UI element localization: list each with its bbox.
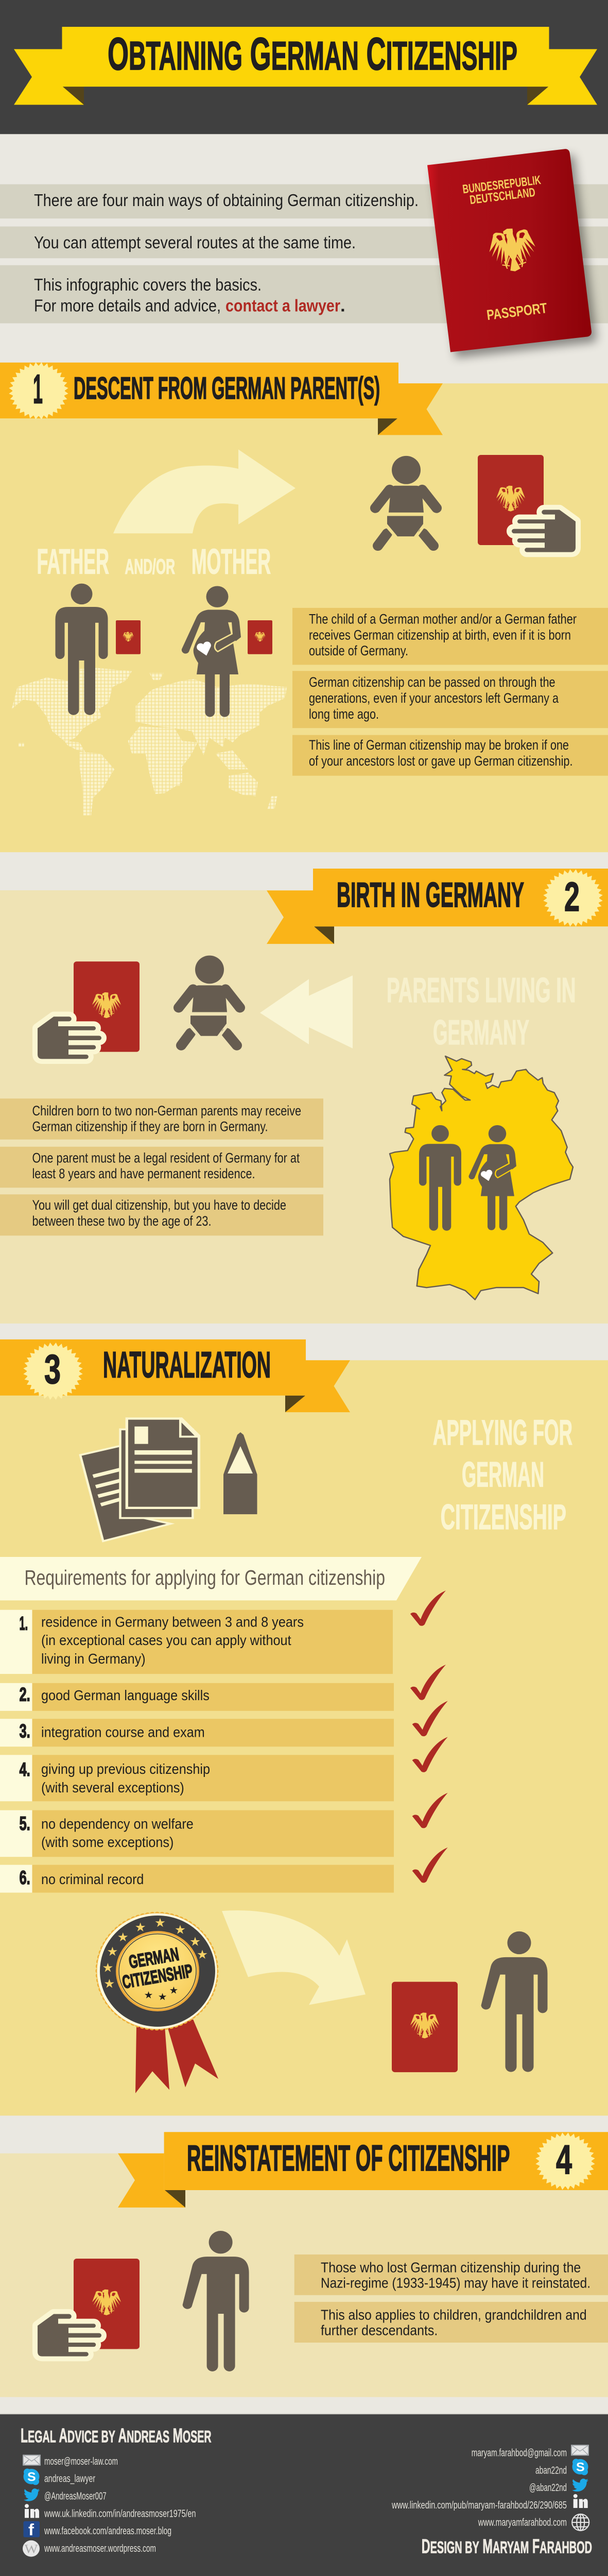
labels: father and/or mother: FATHER bbox=[37, 542, 109, 581]
text: descent facts bbox=[292, 608, 608, 776]
intro panel bbox=[0, 184, 608, 324]
seal: German citizenship: CITIZENSHIP bbox=[120, 1960, 194, 1992]
panel: naturalization bbox=[0, 1360, 608, 2115]
text: reinstatement facts bbox=[294, 2255, 608, 2343]
icon: father bbox=[56, 584, 108, 715]
requirement 2: 2. bbox=[20, 1684, 30, 1705]
contacts: Andreas Moser: W bbox=[25, 2543, 38, 2556]
intro panel: This infographic covers the basics. bbox=[34, 275, 262, 295]
header band bbox=[0, 0, 608, 134]
text: birth facts: least 8 years and have permanent residence. bbox=[32, 1166, 255, 1181]
badge number 2 bbox=[543, 869, 603, 926]
icon: baby bbox=[375, 456, 437, 546]
world map bbox=[12, 668, 287, 815]
icon: person bbox=[183, 2231, 249, 2371]
intro panel: . bbox=[340, 296, 345, 315]
text: birth facts: German citizenship if they are born in Germany. bbox=[32, 1118, 268, 1134]
icon: mother in Germany bbox=[468, 1125, 516, 1230]
intro panel: You can attempt several routes at the same time. bbox=[34, 233, 356, 252]
text: birth facts bbox=[0, 1098, 323, 1235]
requirement 5 bbox=[0, 1810, 394, 1857]
intro panel: contact a lawyer bbox=[225, 296, 340, 315]
icon: mother bbox=[182, 586, 241, 717]
icon: documents bbox=[80, 1418, 199, 1541]
requirement 3 bbox=[0, 1719, 394, 1747]
contacts: Maryam Farahbod bbox=[391, 2445, 589, 2531]
contacts: Andreas Moser bbox=[23, 2455, 196, 2557]
badge number 3 bbox=[23, 1343, 83, 1400]
contacts: Maryam Farahbod: www.maryamfarahbod.com bbox=[478, 2517, 567, 2529]
map of Germany bbox=[390, 1056, 573, 1300]
contacts: Maryam Farahbod: S bbox=[576, 2461, 585, 2474]
seal: German citizenship bbox=[98, 1914, 218, 2093]
section 3 heading: NATURALIZATION bbox=[103, 1345, 271, 1385]
section 4 ribbon bbox=[118, 2132, 608, 2208]
panel: birth in Germany bbox=[0, 890, 608, 1324]
badge number 2: 2 bbox=[564, 874, 580, 920]
requirement 5: no dependency on welfare bbox=[41, 1816, 194, 1832]
passport: PASSPORT bbox=[486, 300, 548, 324]
text: descent facts: long time ago. bbox=[309, 706, 379, 722]
title ribbon bbox=[14, 27, 597, 105]
badge number 3: 3 bbox=[44, 1347, 61, 1393]
text: birth facts: One parent must be a legal resident of Germany for at bbox=[32, 1150, 300, 1165]
contacts: Andreas Moser: f bbox=[28, 2520, 34, 2539]
requirement 4: 4. bbox=[20, 1759, 30, 1780]
contacts: Maryam Farahbod: @aban22nd bbox=[529, 2482, 567, 2494]
checkmarks bbox=[410, 1590, 448, 1883]
labels: father and/or mother: AND/OR bbox=[125, 555, 175, 578]
requirement 3: integration course and exam bbox=[41, 1724, 205, 1740]
passport bbox=[427, 149, 592, 352]
icon: father in Germany bbox=[419, 1125, 461, 1231]
text: birth facts: Children born to two non-German parents may receive bbox=[32, 1103, 301, 1118]
label: parents living in Germany bbox=[387, 971, 576, 1052]
requirement 2 bbox=[0, 1683, 394, 1711]
requirements heading bbox=[0, 1557, 422, 1600]
requirement 6 bbox=[0, 1865, 394, 1893]
text: birth facts: between these two by the age of 23. bbox=[32, 1213, 212, 1229]
requirement 2: good German language skills bbox=[41, 1687, 210, 1704]
arrow: double left bbox=[260, 975, 353, 1048]
icon: passport in hand bbox=[38, 2259, 140, 2357]
intro panel: For more details and advice, bbox=[34, 296, 221, 315]
icon: passport bbox=[392, 1982, 458, 2072]
title: OBTAINING GERMAN CITIZENSHIP bbox=[108, 28, 517, 80]
icon: passport in hand bbox=[478, 455, 576, 552]
text: birth facts: You will get dual citizenship, but you have to decide bbox=[32, 1197, 286, 1213]
label: applying for German citizenship bbox=[433, 1413, 572, 1537]
contacts: Andreas Moser: andreas_lawyer bbox=[44, 2473, 95, 2484]
requirement 1: (in exceptional cases you can apply without bbox=[41, 1632, 291, 1649]
section 1 ribbon bbox=[0, 363, 443, 435]
requirement 6: no criminal record bbox=[41, 1872, 144, 1888]
badge number 1: 1 bbox=[33, 366, 43, 412]
requirement 1: residence in Germany between 3 and 8 years bbox=[41, 1614, 304, 1630]
seal: German citizenship: GERMAN bbox=[127, 1943, 181, 1972]
contacts: Andreas Moser: www.facebook.com/andreas.moser.blog bbox=[44, 2525, 171, 2537]
requirement 3: 3. bbox=[20, 1720, 30, 1741]
requirement 1: 1. bbox=[20, 1613, 28, 1634]
requirement 4 bbox=[0, 1755, 394, 1801]
requirement 5: 5. bbox=[20, 1813, 30, 1834]
requirement 5: (with some exceptions) bbox=[41, 1834, 173, 1851]
text: descent facts: outside of Germany. bbox=[309, 642, 408, 658]
contacts: Maryam Farahbod: aban22nd bbox=[535, 2465, 567, 2476]
icon: passport in hand bbox=[38, 961, 140, 1059]
panel: descent from German parents bbox=[0, 383, 608, 852]
footer band bbox=[0, 2414, 608, 2576]
labels: father and/or mother bbox=[37, 542, 271, 581]
text: reinstatement facts: further descendants. bbox=[321, 2323, 438, 2339]
arrow bbox=[113, 449, 296, 533]
icon: mother's passport bbox=[248, 620, 272, 654]
icon: baby bbox=[179, 956, 240, 1045]
requirement 6: 6. bbox=[20, 1867, 30, 1888]
contacts: Andreas Moser: @AndreasMoser007 bbox=[44, 2490, 107, 2502]
contacts: Andreas Moser: www.andreasmoser.wordpress.com bbox=[44, 2543, 156, 2554]
section 3 ribbon bbox=[0, 1340, 350, 1412]
arrow: curved right-down bbox=[222, 1910, 366, 2005]
section 2 ribbon bbox=[267, 869, 608, 944]
panel: reinstatement bbox=[0, 2154, 608, 2397]
requirement 1 bbox=[0, 1610, 393, 1674]
footer heading: legal advice: LEGAL ADVICE BY ANDREAS MOSER bbox=[21, 2425, 212, 2447]
passport: BUNDESREPUBLIK bbox=[462, 174, 542, 196]
passport: DEUTSCHLAND bbox=[469, 185, 536, 207]
requirement 4: (with several exceptions) bbox=[41, 1780, 184, 1796]
icon: father's passport bbox=[116, 620, 141, 654]
icon: new citizen bbox=[481, 1931, 548, 2072]
requirement 1: living in Germany) bbox=[41, 1651, 146, 1667]
intro panel: There are four main ways of obtaining German citizenship. bbox=[34, 191, 419, 210]
labels: father and/or mother: MOTHER bbox=[192, 542, 271, 581]
contacts: Andreas Moser: www.uk.linkedin.com/in/andreasmoser1975/en bbox=[44, 2508, 196, 2519]
requirement 4: giving up previous citizenship bbox=[41, 1761, 210, 1777]
badge number 4 bbox=[535, 2132, 595, 2190]
icon: pencil bbox=[223, 1432, 257, 1514]
contacts: Andreas Moser: S bbox=[27, 2470, 36, 2484]
contacts: Andreas Moser: moser@moser-law.com bbox=[44, 2455, 118, 2467]
badge number 1 bbox=[9, 362, 68, 419]
badge number 4: 4 bbox=[556, 2137, 572, 2183]
requirements heading: Requirements for applying for German citizenship bbox=[25, 1566, 385, 1589]
